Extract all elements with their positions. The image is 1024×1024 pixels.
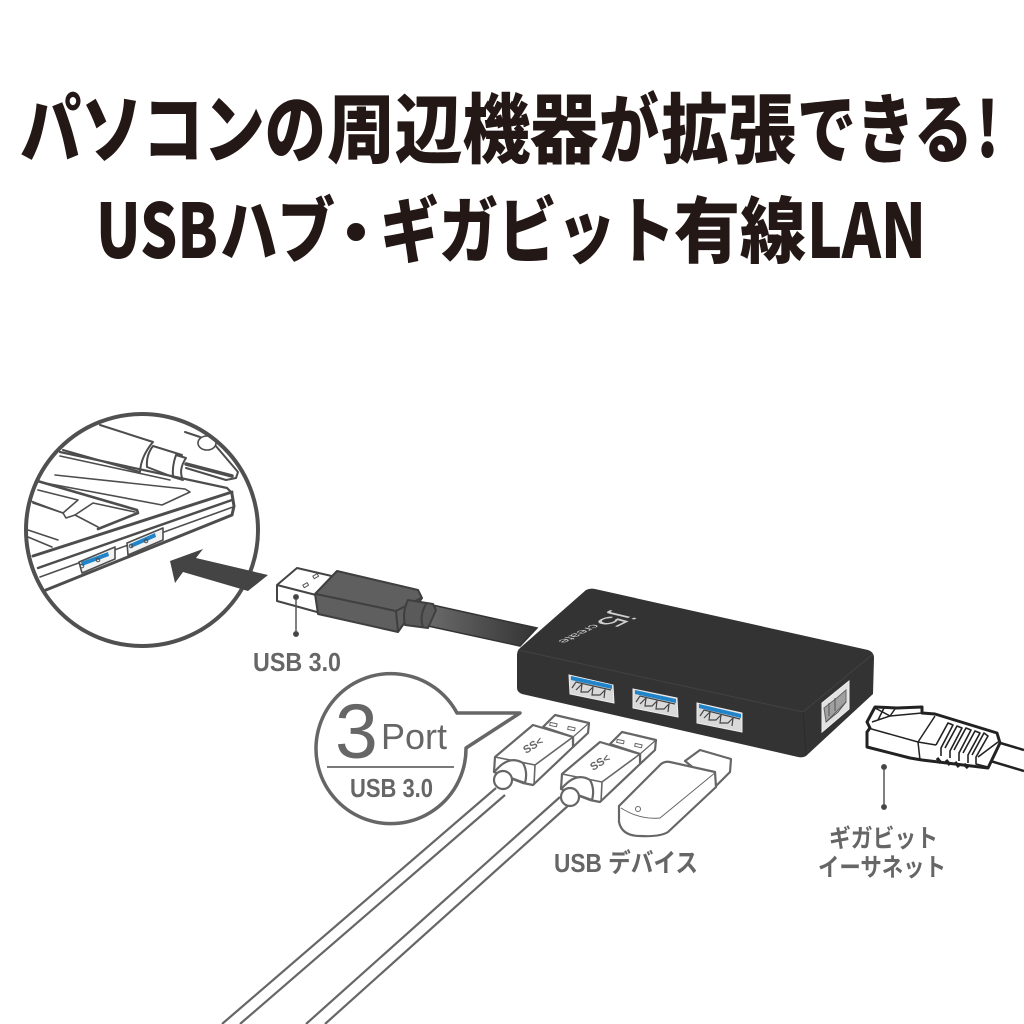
LAN port [822, 681, 849, 732]
hub logo: create [554, 623, 605, 644]
cable: hub USB [428, 604, 537, 646]
title [20, 69, 999, 280]
USB plug 2 [561, 732, 656, 806]
label pointer: USB 3.0 [294, 594, 298, 636]
title line 1: できる [797, 69, 973, 179]
arrow: insert into laptop [170, 549, 268, 591]
plug body [315, 571, 422, 632]
hub body [517, 589, 874, 757]
USB port 3 [697, 703, 742, 732]
callout: 3 Port USB 3.0: Port [381, 716, 447, 757]
USB port 2 [633, 689, 678, 717]
RJ45 plug [867, 707, 1024, 771]
USB plug 1: SS< [521, 735, 545, 757]
USB flash drive [619, 750, 731, 836]
hub logo: j5 [587, 610, 645, 630]
hub logo [554, 610, 645, 644]
title line 2: LAN [807, 171, 926, 280]
plug metal tip [277, 568, 336, 612]
title line 2: ハブ [220, 173, 335, 278]
callout: 3 Port USB 3.0: USB 3.0 [350, 773, 433, 803]
title line 1: が [599, 69, 659, 179]
title line 2: USB [96, 171, 218, 280]
label: ギガビット イーサネット [818, 825, 946, 882]
plug fins [936, 723, 998, 768]
label pointer: ethernet [882, 764, 886, 810]
title line 1 [20, 69, 999, 179]
title line 2: ギガビット [380, 173, 675, 278]
ethernet cable [987, 742, 1024, 771]
title line 1: 拡張 [661, 69, 796, 179]
title line 2: 有線 [674, 173, 806, 278]
USB port 1 [569, 675, 614, 703]
panel: laptop port magnifier [26, 414, 258, 646]
title line 1: 周辺機器 [327, 69, 598, 179]
title line 1: パソコンの [20, 69, 326, 179]
title line 1: ! [976, 69, 999, 179]
callout: 3 Port USB 3.0: 3 [335, 689, 378, 775]
USB cable 2 [306, 797, 570, 1024]
USB cable 1 [222, 788, 505, 1024]
label: USB 3.0: USB 3.0 [253, 647, 341, 677]
label: ギガビット イーサネット: ギガビット [829, 825, 938, 853]
callout: 3 Port USB 3.0 [316, 674, 520, 824]
label: ギガビット イーサネット: イーサネット [818, 854, 946, 882]
laptop body [28, 452, 234, 590]
label: USB デバイス: USB デバイス [554, 848, 698, 878]
USB plug 1 [494, 715, 589, 789]
title line 2 [96, 171, 926, 280]
USB 3.0 plug [277, 568, 436, 632]
plugged USB device in laptop [63, 425, 238, 480]
USB plug 2: SS< [588, 752, 612, 774]
laptop USB port 2 [127, 528, 163, 555]
plug collar [404, 600, 436, 628]
laptop USB port 1 [79, 547, 115, 573]
